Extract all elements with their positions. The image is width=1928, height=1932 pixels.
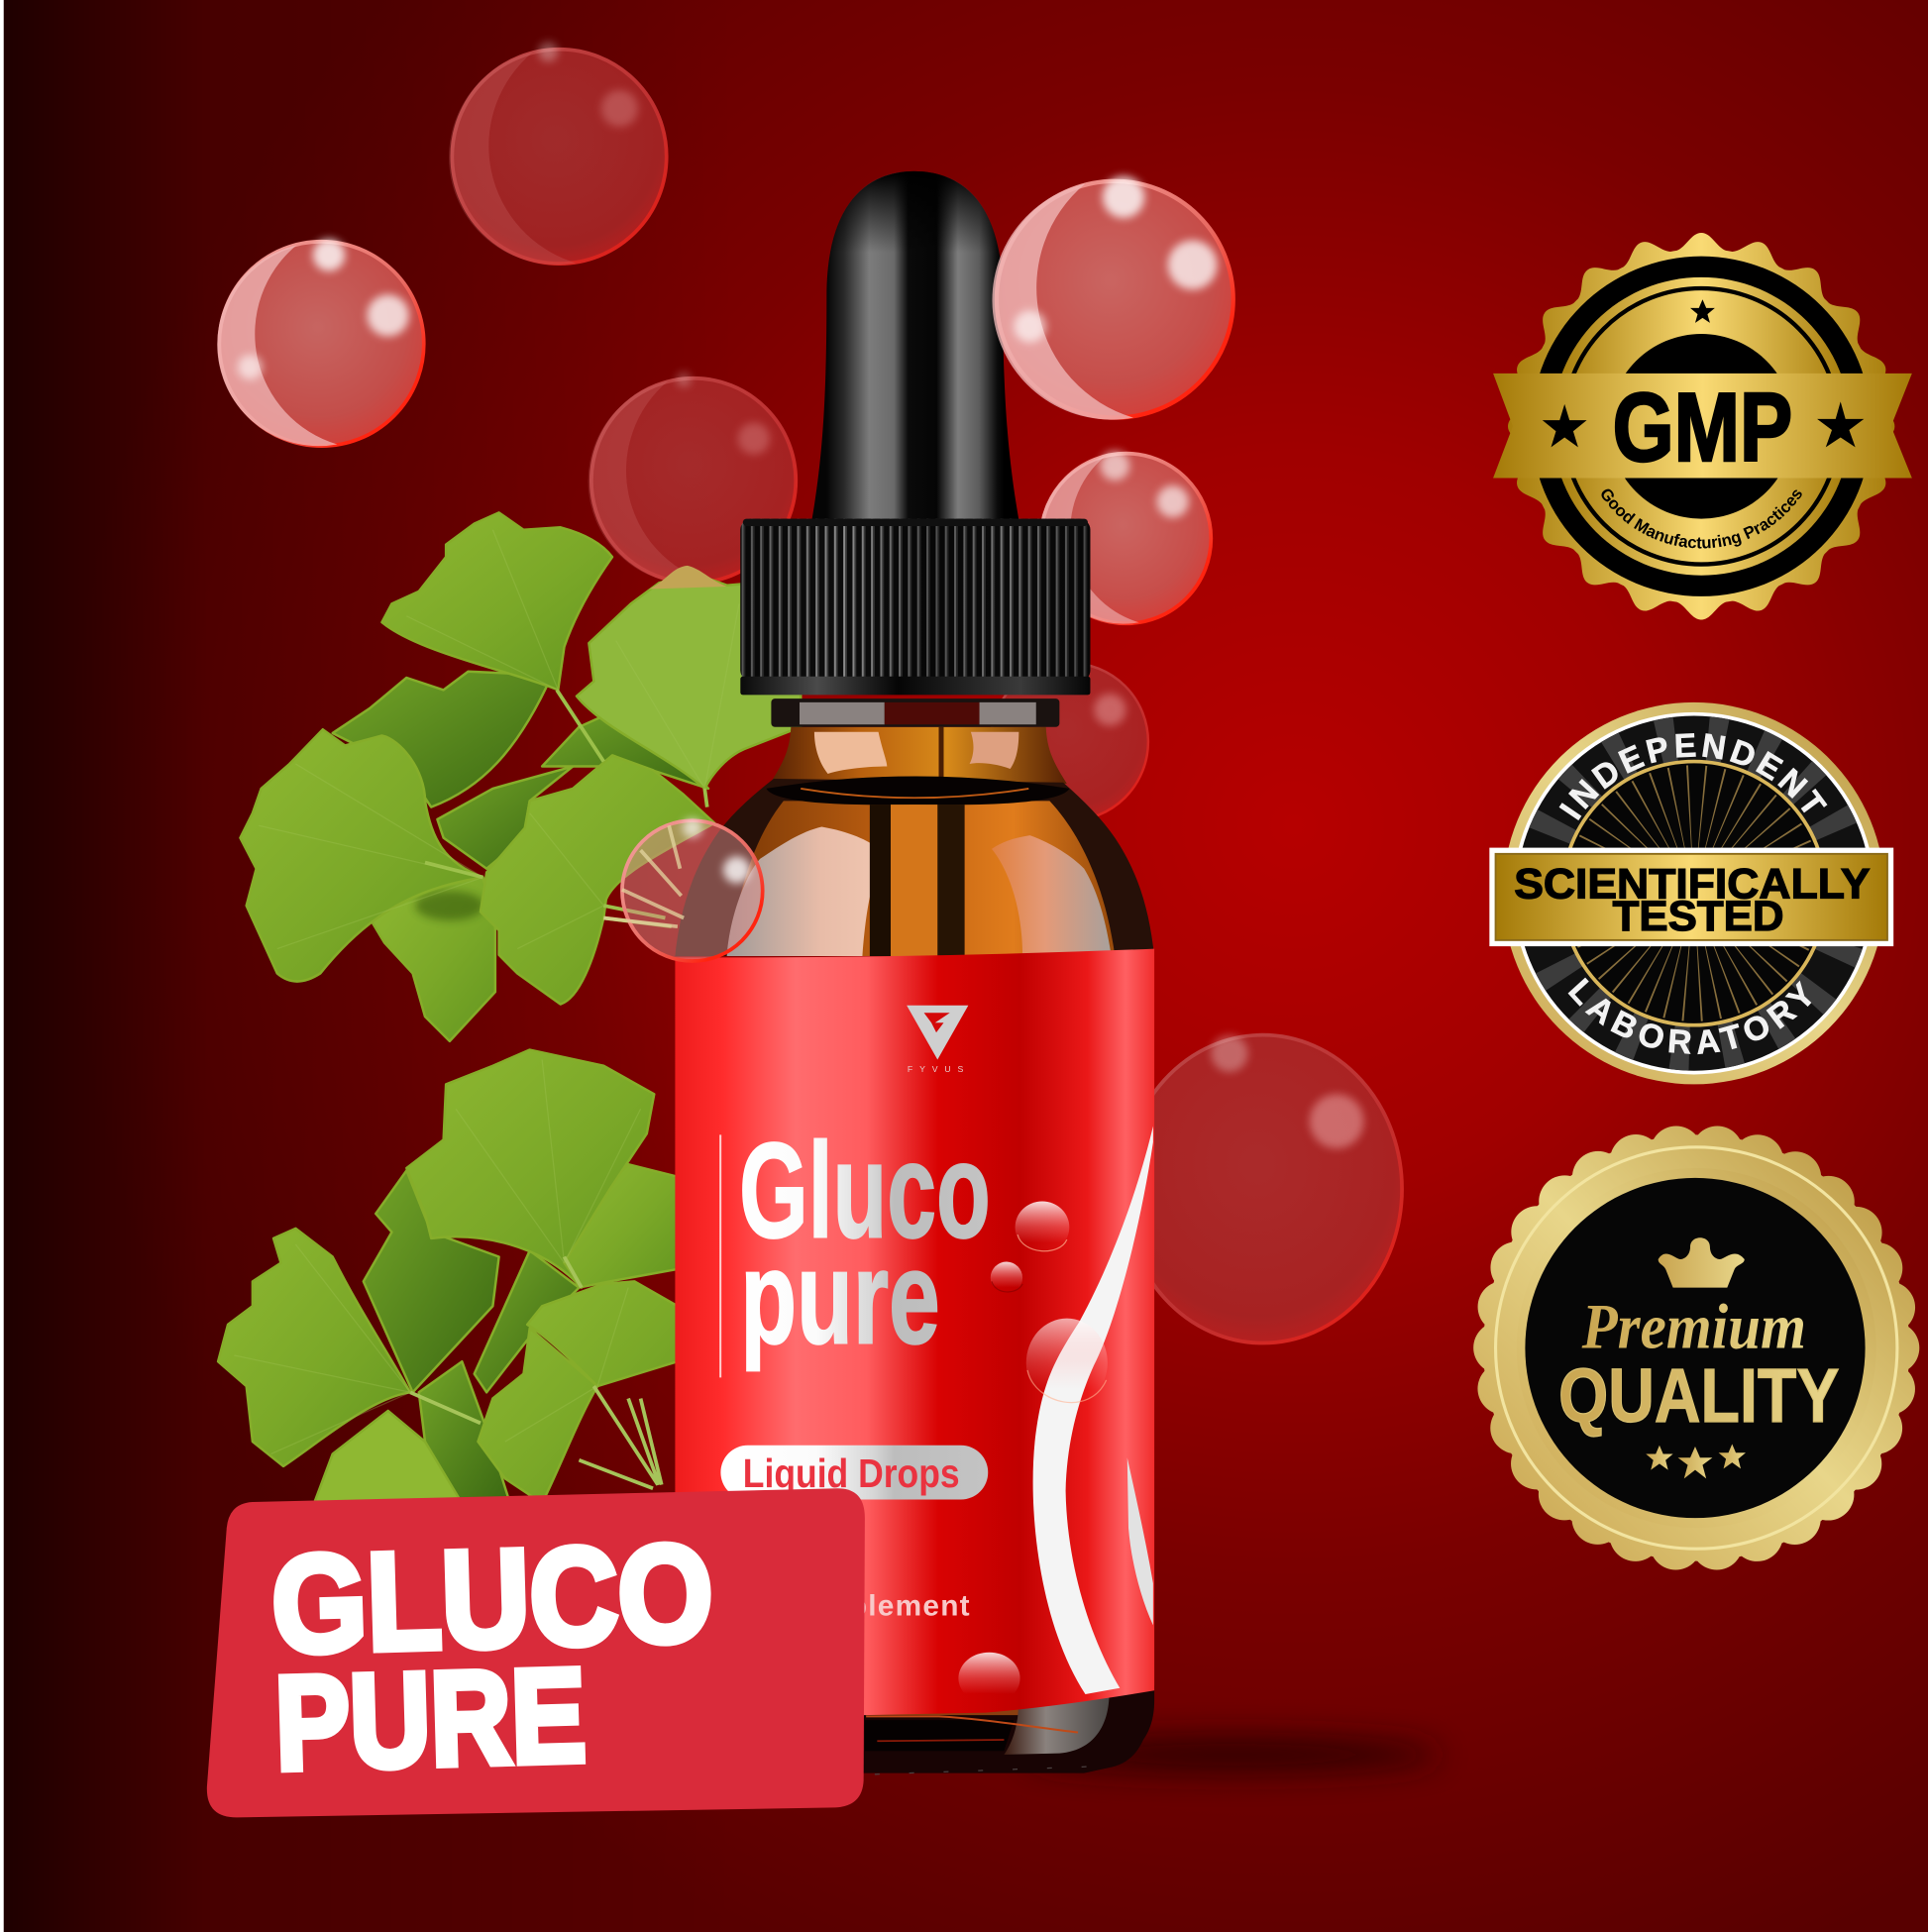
QUALITY text: QUALITY [1558,1353,1839,1439]
scalloped edge [1503,228,1899,625]
card title: GLUCO [269,1515,715,1682]
badge: scientifically tested [1489,701,1894,1084]
dropper bulb [811,171,1018,520]
bubble: over leaf and shoulder [603,818,763,961]
bubble: right of shoulder [991,663,1148,820]
bubble: right of cap [1039,451,1211,624]
GMP text: GMP [1613,373,1792,482]
label divider [719,1134,721,1377]
product name [739,1115,991,1372]
leaf: top [406,1050,654,1288]
leaf: left dark [364,1170,499,1392]
banner: TESTED [1613,893,1784,939]
leaf: left large [240,729,482,982]
bubbles behind bottle [217,42,1402,1343]
badge: premium quality [1483,1134,1909,1561]
dropper bottle [671,171,1154,1774]
amber liquid [729,801,1115,956]
supplement line: Dietary Supplement [671,1589,971,1622]
crown [1659,1237,1745,1288]
leaf: bottom [314,1411,462,1503]
white swoosh [1033,1127,1153,1694]
card title: PURE [273,1641,588,1798]
leaf: top [381,512,612,690]
leaf: front [478,1281,678,1503]
outer ring [1503,702,1884,1084]
leaf: middle dark [437,767,573,869]
leaf: lower dark [419,1361,510,1503]
leaf: centre [481,755,714,1005]
leaf shadow: lower [415,891,484,920]
banner [1489,848,1893,946]
leaf stems [410,1256,662,1488]
ribbed cap [740,519,1090,695]
curved tagline: Good Manufacturing Practices [1601,489,1802,549]
bubble: right of dropper [992,176,1233,420]
bubble: mid left [589,373,796,584]
rings [1496,1147,1897,1549]
neck collar [771,698,1059,727]
brand logo: FYVUS [908,1064,970,1074]
red label [671,949,1154,1719]
ginkgo leaves: upper cluster [240,512,801,1041]
leaf: lower [370,877,495,1041]
ribbon [1493,374,1912,479]
right glass highlight [992,835,1112,955]
leaf: centre dark [475,1250,579,1392]
amber neck [770,727,1067,784]
dark glass shoulder [675,779,1154,956]
neck highlights [814,727,1018,783]
bubble: top left [217,239,424,446]
leaf: right behind [565,1164,678,1288]
product name: pure [740,1224,940,1372]
bubble: large right of bottle [1124,1035,1402,1343]
curved text: INDEPENDENT [1559,733,1827,820]
leaf: back dark [333,672,552,807]
bottle base [675,1685,1154,1774]
bubble: top centre [449,42,667,265]
floor shadow [1022,1738,1442,1771]
card title [269,1515,718,1798]
Liquid Drops pill: Liquid Drops [743,1450,960,1496]
brand logo [907,1006,970,1074]
leaf veins [259,530,739,949]
ginkgo leaves: lower cluster [218,1050,678,1503]
top star [1690,299,1715,323]
white swoosh sliver [1127,1457,1153,1625]
leaf stems [425,690,707,926]
three stars [1646,1445,1746,1478]
leaf: behind right [542,704,708,789]
product name: Gluco [739,1115,991,1266]
rings [1532,257,1872,596]
banner: SCIENTIFICALLY [1514,861,1871,908]
leaf tip seen through bubble [649,566,727,589]
product name card [207,1488,865,1817]
label droplets [958,1202,1108,1704]
Premium text: Premium [1581,1291,1806,1362]
leaf: left [218,1229,410,1466]
inner dropper tube [870,805,965,956]
liquid surface [766,776,1069,805]
ribbon stars [1543,401,1864,447]
leaf: right top [577,575,801,789]
leaf veins [234,1060,641,1453]
left glass highlight [727,826,884,956]
scalloped edge [1483,1134,1909,1561]
curved text [1559,733,1827,1054]
badge: GMP [1493,233,1912,620]
curved text: LABORATORY [1567,977,1811,1054]
